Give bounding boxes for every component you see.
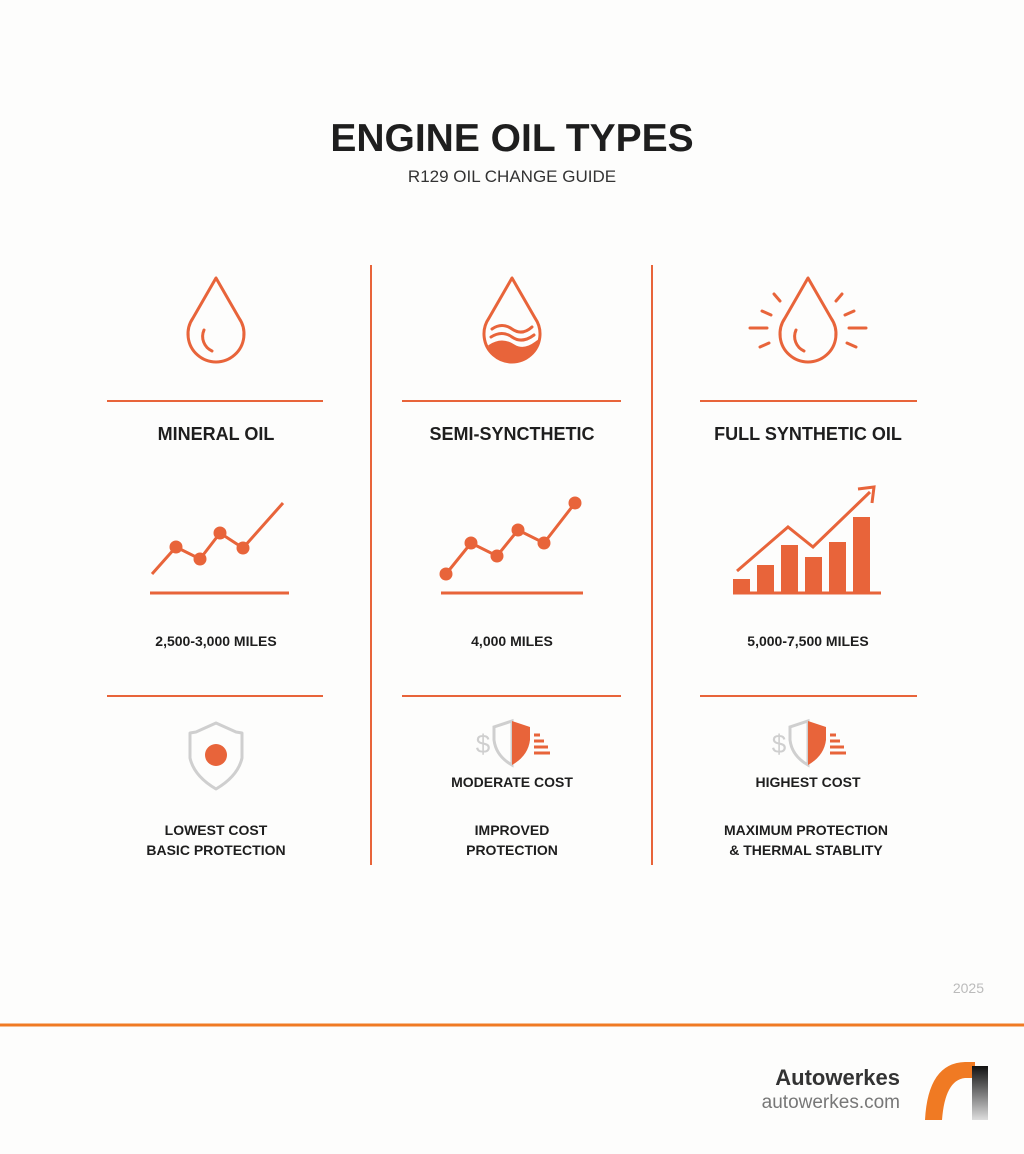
description: & THERMAL STABLITY [729, 842, 883, 858]
description: BASIC PROTECTION [146, 842, 286, 858]
chart: line [150, 503, 289, 593]
description: IMPROVED [475, 822, 549, 838]
icon: cost shield: $ [772, 729, 787, 759]
chart: line [441, 498, 583, 593]
icon: cost shield: $ [476, 729, 491, 759]
icon: shining drop [750, 278, 866, 362]
icon: oil drop [188, 278, 244, 362]
interval text: 4,000 MILES [471, 633, 553, 649]
panel: mineral oil [107, 278, 323, 858]
description: PROTECTION [466, 842, 558, 858]
label: highest cost: HIGHEST COST [755, 774, 861, 790]
footer brand: Autowerkes [775, 1065, 900, 1090]
panel: semi-synthetic [402, 278, 621, 858]
interval text: 2,500-3,000 MILES [155, 633, 277, 649]
footer brand [762, 1065, 900, 1113]
description: LOWEST COST [165, 822, 268, 838]
description: MAXIMUM PROTECTION [724, 822, 888, 838]
icon: cost shield [772, 721, 846, 765]
heading: mineral oil: MINERAL OIL [158, 424, 274, 444]
logo [925, 1062, 988, 1120]
icon: shield [190, 723, 242, 789]
heading: semi-synthetic: SEMI-SYNCTHETIC [429, 424, 595, 444]
heading: full synthetic: FULL SYNTHETIC OIL [714, 424, 902, 444]
footer brand: autowerkes.com [762, 1092, 900, 1113]
label: moderate cost: MODERATE COST [451, 774, 573, 790]
title: ENGINE OIL TYPES [330, 117, 694, 160]
subtitle: R129 OIL CHANGE GUIDE [408, 167, 616, 186]
panel: full synthetic [700, 278, 917, 858]
icon: drop with waves [484, 278, 540, 362]
icon: cost shield [476, 721, 550, 765]
interval text: 5,000-7,500 MILES [747, 633, 869, 649]
chart: bars with arrow [733, 487, 881, 593]
year: 2025 [953, 980, 984, 996]
